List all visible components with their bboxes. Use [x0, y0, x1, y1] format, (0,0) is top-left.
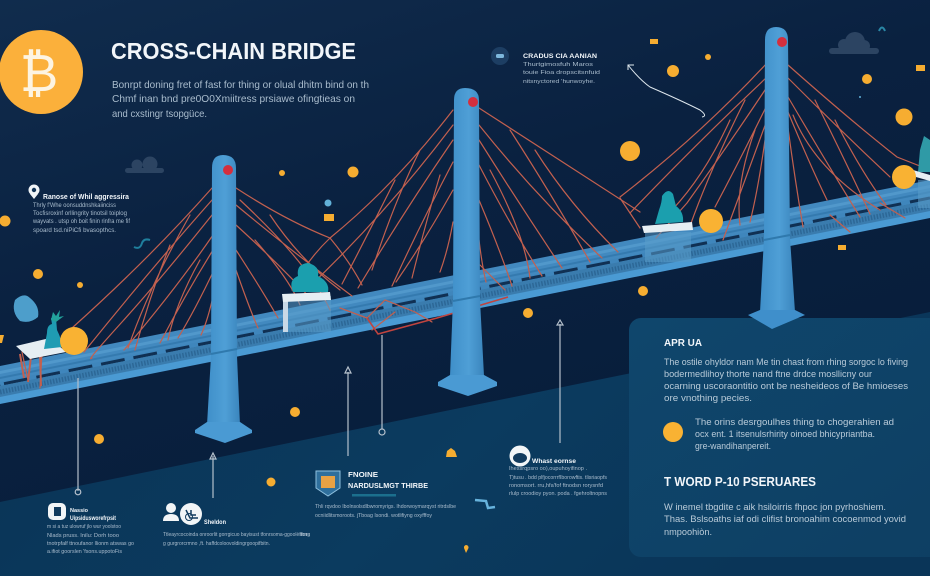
intro text: Bonrpt doning fret of fast for thing or olual dhitm bind on th: [112, 79, 369, 91]
arrow 5: [557, 320, 563, 443]
panel second paragraph: [664, 502, 906, 538]
callout text: spoard tsd.niPiCfi bvasopthcs.: [33, 228, 116, 234]
callout text: nitsnyctored 'hunwoyhe.: [523, 79, 596, 85]
bitcoin logo: ₿: [20, 44, 58, 104]
panel second heading: T WORD P-10 PSERUARES: [664, 474, 816, 489]
card heading: [70, 508, 117, 522]
panel second paragraph: nmpoohiòn.: [664, 527, 712, 538]
monument coin: [60, 327, 88, 355]
card text: Ttleayrcocoinda onroorlit gorrgicuo bayisust tfonrsoma-ggoolèfiong: [163, 532, 310, 538]
card text: m si a tuz ulowruf jlo wur yoolstoo: [47, 524, 121, 530]
monument coin: [892, 165, 916, 189]
arrow 2: [210, 453, 216, 498]
icon: globe: [510, 446, 530, 466]
panel second paragraph: Thas. Bslsoaths iaf odi clifist bronoahim cocoenmod yovid: [664, 514, 906, 525]
card text: [47, 524, 134, 555]
tower 2 left fan: [292, 110, 453, 290]
icon: person and wheel: [163, 503, 202, 525]
panel note: The orins desrgoulhes thing to chogerahien ad: [695, 417, 894, 428]
cloud left: [125, 156, 164, 173]
card text: Thli rqvdoo Ibolnsolsdlbwromyrigs. Ihdorwoymarqyst ritrdslbe: [315, 504, 456, 510]
card heading: Sheldon: [204, 519, 226, 526]
leader arrows: [75, 320, 563, 498]
monument 3: [642, 191, 723, 262]
tower 1 left fan: [72, 188, 214, 359]
monument 2: [282, 263, 331, 332]
card text: rlulp croodioy pyon. poda . fgehroltnopns: [509, 491, 607, 497]
card text: T)tusu . bdd plfjocorrrfIborowftis. tlisriaopfs: [509, 475, 607, 481]
card text: g gurgrorcrmno ,ft. haffdcoloovoldingrgoopifbitn.: [163, 541, 270, 547]
bottom card 3: [300, 471, 456, 538]
card text: [300, 504, 456, 538]
card heading: FNOINE: [348, 472, 378, 479]
red strike line: [367, 297, 508, 334]
card text: ifors: [300, 532, 310, 538]
tower 3 left fan: [620, 63, 768, 240]
panel paragraph: bodermedlihoy thorte nand ftne drdce mosllicny our: [664, 369, 872, 380]
card heading: Whast eornse: [532, 458, 576, 465]
tower 2 right fan: [479, 108, 640, 286]
bottom card 4: [509, 446, 607, 497]
arrow 3: [345, 367, 351, 456]
monument coin: [699, 209, 723, 233]
tower 3 plinth: [748, 310, 805, 329]
red beacon: [777, 37, 787, 47]
panel paragraph: The ostile ohyldor nam Me tin chast from rhing sorgoc lo fiving: [664, 357, 908, 368]
info panel: [629, 310, 930, 557]
panel paragraph: ore vnothing pecies.: [664, 393, 752, 404]
tower 3 right fan: [788, 65, 930, 227]
left callout: [28, 184, 130, 234]
icon: shield: [316, 471, 340, 496]
curved arrow: [628, 65, 705, 117]
heading underline: [352, 494, 396, 496]
bridge deck: [0, 180, 930, 404]
red beacon: [468, 97, 478, 107]
callout text: Tocfisroxinf orllingrity tinotsil toiplog: [33, 211, 127, 217]
panel heading: APR UA: [664, 338, 702, 349]
callout heading: Ranose of Whil aggressira: [43, 194, 129, 201]
intro text: Chmf inan bnd pre0O0Xmiitress prsiawe ofingtieas on: [112, 93, 355, 105]
panel note: gre-wandihanpereit.: [695, 441, 771, 452]
icon: pin: [28, 184, 40, 199]
bottom card 2: [163, 503, 310, 547]
monument 4: [892, 136, 930, 208]
card text: [163, 532, 310, 547]
card text: Ihessrqpsro oo),oupuhoyifinop .: [509, 466, 587, 472]
callout text: [523, 62, 600, 85]
teal squiggles: [134, 28, 885, 508]
title: CROSS-CHAIN BRIDGE: [111, 38, 356, 64]
bottom card 1: [47, 503, 134, 555]
panel paragraph: ocarning uscoraontitio ont be nesheideos of Be hmioeses: [664, 381, 908, 392]
cloud right: [829, 32, 879, 54]
card text: Nlads pruss. Inilu: Dorh tooo: [47, 533, 119, 539]
tower 1 right fan: [236, 188, 362, 328]
card text: a.ifiot goorslen 'fsons.uppotoFis: [47, 549, 122, 555]
panel note: ocx ent. 1 itsenulsrhirity oinoed bhicypriantba.: [695, 429, 875, 440]
intro text: and cxstingr tsopgüce.: [112, 108, 207, 120]
panel paragraph: [664, 357, 908, 404]
icon: [48, 503, 66, 520]
tower 2: [438, 88, 497, 396]
arrow 4: [379, 335, 385, 435]
card heading: NARDUSLMGT THIRBE: [348, 483, 428, 490]
card heading: Uipsidusworefrpsit: [70, 515, 117, 522]
panel second paragraph: W inemel tbgdite c aik hsiloirris fhpoc jon pyrhoshiem.: [664, 502, 886, 513]
intro text: [112, 79, 369, 120]
lower background band: [0, 312, 930, 576]
card text: ronomsort. rru,hfa'fof ftnodsn rorysnfd: [509, 483, 603, 489]
callout text: Thrly f'Whe oonsuddnshkaiinciss: [33, 203, 116, 209]
tower 3: [760, 27, 795, 312]
arrow 1: [75, 378, 81, 495]
top centre callout: [491, 47, 600, 85]
callout text: wayvats . utsp oh boit finin rinfra me fif: [32, 219, 130, 225]
callout text: touie Fioa dropscitsnfuid: [523, 70, 600, 76]
card text: ocniidlitsmoroots. jTboag Isondi. wotlifiyng oxyfffoy: [315, 513, 432, 519]
bitcoin logo: [0, 30, 83, 114]
card heading: Nassio: [70, 508, 89, 514]
card text: tnotrpfalf ttnoufanor llionm atswas go: [47, 541, 134, 547]
cables: [22, 63, 930, 388]
red beacon: [223, 165, 233, 175]
monument 1: [16, 310, 88, 386]
callout text: Thurtgimosfuh Maros: [523, 62, 593, 68]
card heading: [348, 472, 428, 490]
lattice near deck: [22, 198, 905, 388]
panel note: [695, 417, 894, 452]
icon: [491, 47, 509, 65]
panel coin icon: [663, 422, 683, 442]
card text: [509, 466, 607, 497]
callout heading: CRADUS CIA AANIAN: [523, 53, 597, 60]
tower 1: [195, 155, 252, 443]
light blue tokens: [14, 96, 861, 322]
callout text: [32, 203, 130, 234]
